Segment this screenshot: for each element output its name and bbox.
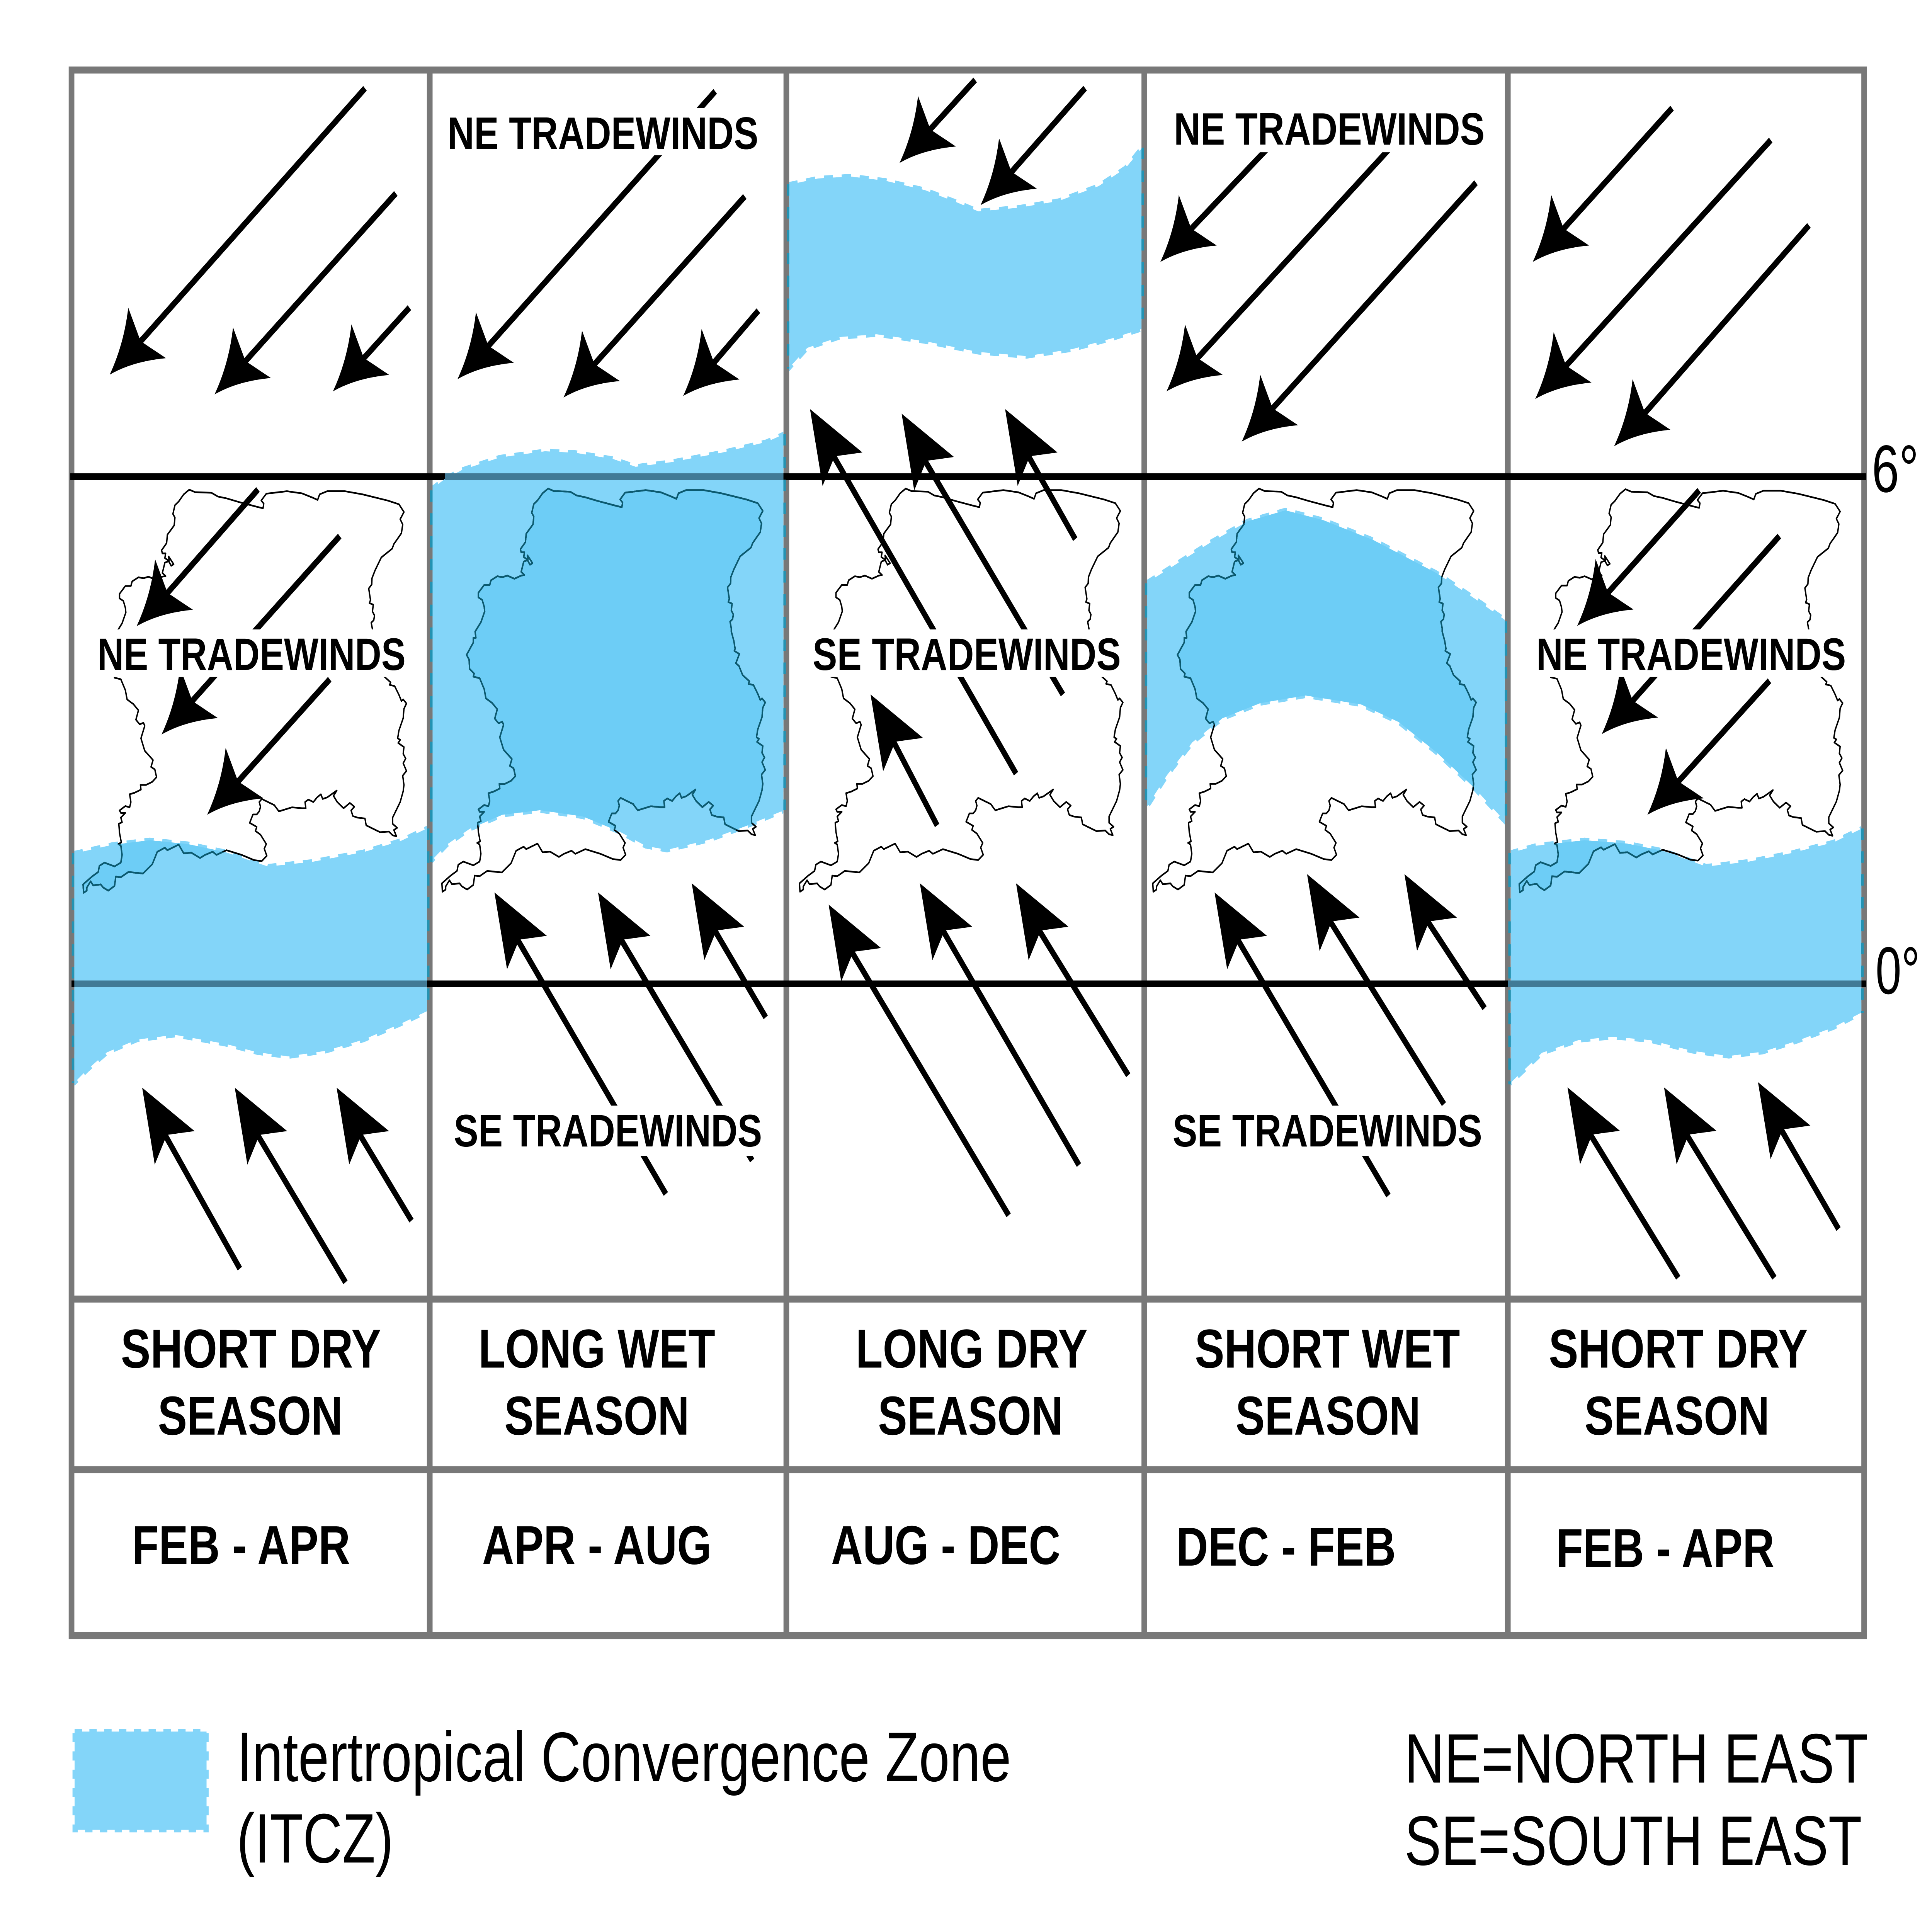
season label: SEASON [878,1385,1063,1447]
months label: FEB - APR [1556,1518,1774,1579]
arrows: NE winds [457,91,759,398]
panel: short dry season Feb-Apr repeat [1508,108,1862,1579]
season label: SEASON [504,1385,689,1447]
table grid [71,70,1864,1636]
arrows: NE winds north [110,88,409,395]
label: NE tradewinds: NE TRADEWINDS [1536,629,1846,680]
equator line through band [1508,983,1861,985]
season label [1549,1318,1808,1447]
map of Suriname [799,488,1123,892]
arrows: NE winds [1160,143,1476,442]
latitude lines [70,477,1866,984]
legend: abbreviations [1405,1719,1868,1880]
arrows: NE winds north [1533,108,1809,446]
season label: LONG WET [478,1318,715,1379]
season label: LONG DRY [856,1318,1088,1379]
map of Suriname [442,488,765,892]
months label: FEB - APR [132,1515,350,1576]
label: SE tradewinds: SE TRADEWINDS [454,1105,762,1156]
band edge dashes [788,148,1143,369]
6 degree line through band [445,476,783,478]
band edge dashes [1146,583,1506,822]
season label: SHORT WET [1195,1318,1460,1379]
legend: ITCZ text [237,1718,1011,1878]
label: NE tradewinds: NE TRADEWINDS [447,108,759,159]
label: NE tradewinds: NE TRADEWINDS [97,629,406,680]
map of Suriname [83,490,406,893]
legend: ITCZ text: (ITCZ) [237,1799,393,1878]
ITCZ band [74,828,428,1083]
season label [856,1318,1088,1447]
panel: long wet season Apr-Aug [430,91,785,1576]
legend: ITCZ text: Intertropical Convergence Zone [237,1718,1011,1796]
map of Suriname [1153,488,1476,892]
season label [1195,1318,1460,1447]
equator line through band [74,983,427,985]
band edge dashes [73,828,428,1083]
season label: SEASON [158,1385,343,1447]
panel: short wet season Dec-Feb [1146,104,1507,1577]
ITCZ band [789,148,1142,369]
band edge dashes [431,434,785,862]
legend: abbreviations: SE=SOUTH EAST [1405,1801,1862,1880]
band edge dashes [1510,828,1862,1084]
ITCZ band [1147,510,1507,823]
legend: abbreviations: NE=NORTH EAST [1405,1719,1868,1798]
arrows: NE winds over map [137,490,340,815]
arrows: SE winds south [142,1088,412,1282]
label: NE tradewinds: NE TRADEWINDS [1174,104,1485,155]
arrows: SE winds south [1568,1082,1838,1278]
arrows: SE winds over map [810,409,1075,825]
latitude label 0 degrees: 0° [1876,934,1920,1008]
legend: ITCZ swatch [75,1731,207,1830]
label: SE tradewinds: SE TRADEWINDS [1173,1105,1482,1156]
panel: short dry season Feb-Apr [73,88,428,1576]
arrows: SE winds [1214,874,1485,1196]
season label [478,1318,715,1447]
map of Suriname [1519,489,1843,892]
ITCZ band [1509,828,1862,1084]
months label: APR - AUG [482,1515,711,1576]
label: SE tradewinds: SE TRADEWINDS [813,629,1121,680]
season label: SEASON [1585,1385,1769,1447]
panel: long dry season Aug-Dec [788,80,1143,1576]
months label: AUG - DEC [831,1515,1060,1576]
arrows: NE winds over map [1577,490,1779,815]
season label: SEASON [1236,1385,1420,1447]
months label: DEC - FEB [1176,1516,1396,1577]
arrows: NE winds [900,80,1085,205]
arrows: SE winds [495,883,766,1194]
arrows: SE winds south [828,883,1128,1215]
season label [121,1318,381,1447]
season label: SHORT DRY [1549,1318,1808,1379]
latitude label 6 degrees: 6° [1872,432,1919,506]
season label: SHORT DRY [121,1318,381,1379]
ITCZ band [430,434,784,862]
